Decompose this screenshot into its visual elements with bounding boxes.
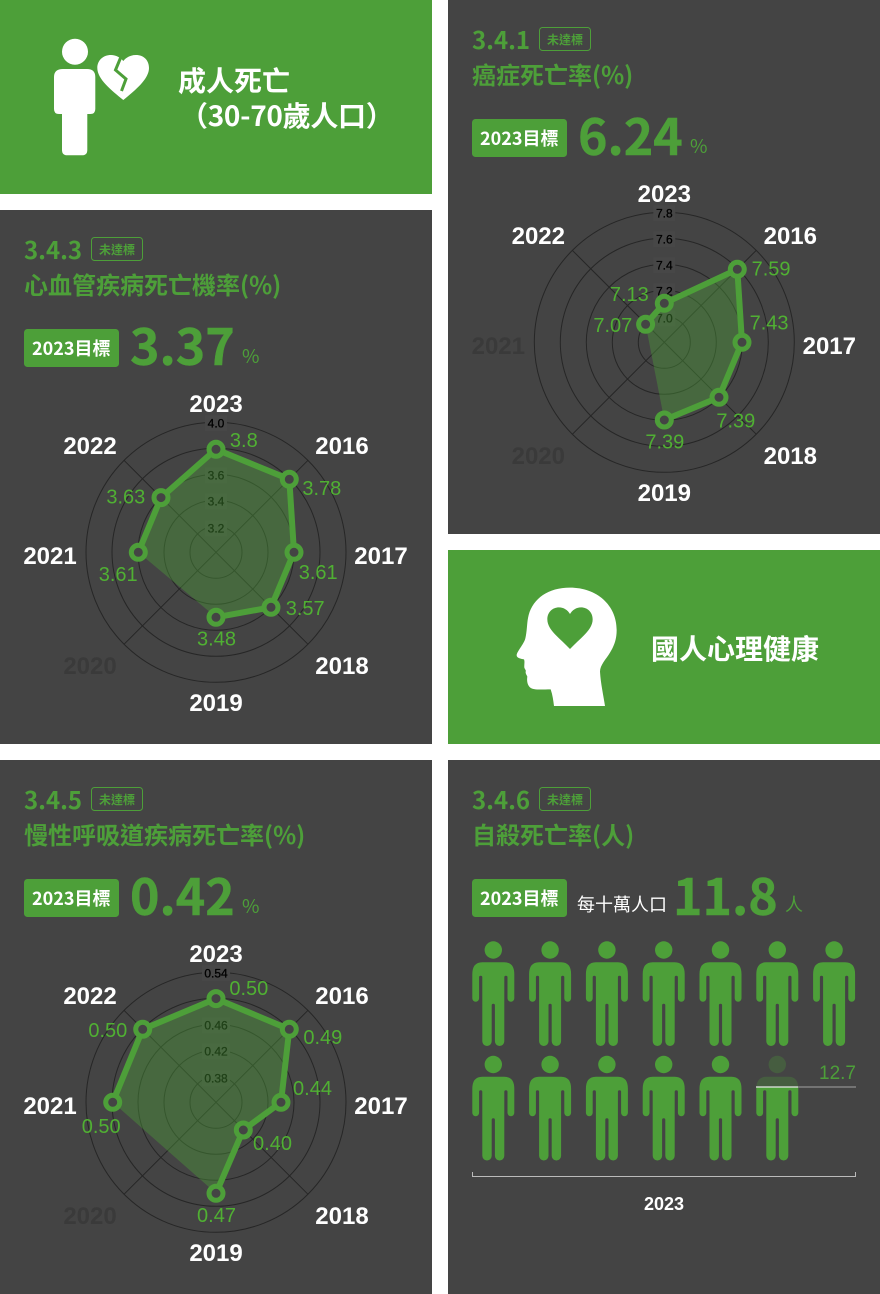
heading: adult mortality: 成人死亡 xyxy=(178,60,290,100)
radar chart: cancer mortality: 7.4 xyxy=(656,258,673,272)
heading: 3.4.5: 慢性呼吸道疾病死亡率(%) xyxy=(24,816,305,851)
radar chart: cancer mortality: 7.8 xyxy=(656,206,673,220)
radar chart: cancer mortality: 2017 xyxy=(803,333,856,360)
heading: 3.4.1: 未達標 xyxy=(547,31,583,48)
pictogram chart: people count xyxy=(472,941,855,1160)
icon: person with broken heart xyxy=(54,39,149,155)
radar chart: chronic respiratory mortality: 0.46 xyxy=(204,1018,228,1032)
target value: 0.42%: % xyxy=(242,892,260,919)
radar chart: cardiovascular mortality: 2016 xyxy=(315,433,369,460)
radar chart: chronic respiratory mortality: 0.42 xyxy=(204,1044,228,1058)
radar chart: cancer mortality: 2022 xyxy=(512,223,565,250)
radar chart: chronic respiratory mortality xyxy=(23,941,408,1267)
radar chart: cardiovascular mortality: 4.0 xyxy=(208,416,225,430)
radar chart: cardiovascular mortality: 2020 xyxy=(63,653,117,680)
panel: 3.4.1 cancer mortality xyxy=(448,0,880,534)
heading: 3.4.1: 癌症死亡率(%) xyxy=(472,56,633,91)
radar chart: chronic respiratory mortality: 2020 xyxy=(63,1203,117,1230)
radar chart: chronic respiratory mortality: 0.54 xyxy=(204,966,228,980)
target value: 11.8 per 100,000: 每十萬人口 xyxy=(577,891,667,917)
radar chart: cardiovascular mortality: 3.6 xyxy=(208,468,225,482)
panel: mental health banner xyxy=(448,550,880,744)
radar chart: cancer mortality: 7.07 xyxy=(593,315,632,337)
heading: 3.4.6: 自殺死亡率(人) xyxy=(472,816,634,851)
radar chart: cardiovascular mortality: 3.8 xyxy=(230,430,258,452)
heading: mental health: 國人心理健康 xyxy=(651,628,819,668)
radar chart: cardiovascular mortality: 2023 xyxy=(189,391,243,418)
heading: 3.4.3: 心血管疾病死亡機率(%) xyxy=(24,266,281,301)
target value: 0.42% xyxy=(24,858,260,930)
radar chart: cancer mortality: 7.6 xyxy=(656,232,673,246)
radar chart: chronic respiratory mortality: 2018 xyxy=(315,1203,369,1230)
panel: 3.4.3 cardiovascular mortality xyxy=(0,210,432,744)
radar chart: cardiovascular mortality: 3.57 xyxy=(286,598,325,620)
target value: 6.24%: 6.24 xyxy=(578,98,683,170)
target value: 3.37%: 2023目標 xyxy=(32,335,110,361)
radar chart: cancer mortality: 7.39 xyxy=(645,431,684,453)
radar chart: chronic respiratory mortality: 0.49 xyxy=(303,1027,342,1049)
heading: 3.4.3: 未達標 xyxy=(99,241,135,258)
radar chart: cardiovascular mortality: 2022 xyxy=(63,433,117,460)
target value: 11.8 per 100,000: 2023目標 xyxy=(480,885,558,911)
radar chart: cancer mortality: 2023 xyxy=(638,181,691,208)
radar chart: cancer mortality: 2019 xyxy=(638,480,691,507)
heading: 3.4.3: 3.4.3 xyxy=(24,231,82,266)
axis bracket: 2023 xyxy=(472,1172,856,1214)
radar chart: chronic respiratory mortality: 0.38 xyxy=(204,1071,228,1085)
heading: adult mortality xyxy=(178,60,393,135)
panel: 3.4.6 suicide mortality xyxy=(448,760,880,1294)
heading: 3.4.1: 3.4.1 xyxy=(472,21,530,56)
heading: 3.4.6: 未達標 xyxy=(547,791,583,808)
reference line: 12.7 xyxy=(756,1063,856,1087)
radar chart: chronic respiratory mortality: 2016 xyxy=(315,983,369,1010)
heading: 3.4.6 xyxy=(472,781,634,851)
radar chart: chronic respiratory mortality: 2017 xyxy=(354,1093,408,1120)
radar chart: cardiovascular mortality: 3.63 xyxy=(106,486,145,508)
radar chart: cancer mortality: 7.43 xyxy=(750,312,789,334)
target value: 3.37%: 3.37 xyxy=(130,308,235,380)
radar chart: cardiovascular mortality: 3.78 xyxy=(302,478,341,500)
panel: 3.4.5 chronic respiratory mortality xyxy=(0,760,432,1294)
radar chart: chronic respiratory mortality: 0.50 xyxy=(229,978,268,1000)
radar chart: cancer mortality: 7.0 xyxy=(656,311,673,325)
radar chart: cardiovascular mortality: 2018 xyxy=(315,653,369,680)
radar chart: chronic respiratory mortality: 0.50 xyxy=(82,1116,121,1138)
radar chart: cardiovascular mortality: 3.4 xyxy=(208,494,225,508)
panel: adult mortality banner xyxy=(0,0,432,194)
target value: 11.8 per 100,000: 人 xyxy=(785,891,803,917)
radar chart: cardiovascular mortality: 3.2 xyxy=(208,521,225,535)
target value: 3.37%: % xyxy=(242,342,260,369)
radar chart: cancer mortality: 7.59 xyxy=(752,258,791,280)
radar chart: chronic respiratory mortality: 0.44 xyxy=(293,1078,332,1100)
icon: head with heart xyxy=(517,588,617,706)
radar chart: chronic respiratory mortality: 0.40 xyxy=(253,1133,292,1155)
radar chart: chronic respiratory mortality: 0.47 xyxy=(197,1205,236,1227)
target value: 6.24% xyxy=(472,98,708,170)
radar chart: cancer mortality: 2020 xyxy=(512,443,565,470)
target value: 6.24%: 2023目標 xyxy=(480,125,558,151)
radar chart: cancer mortality: 2018 xyxy=(764,443,817,470)
radar chart: cancer mortality: 2021 xyxy=(472,333,525,360)
target value: 3.37% xyxy=(24,308,260,380)
heading: 3.4.1 xyxy=(472,21,633,91)
radar chart: cardiovascular mortality: 3.48 xyxy=(197,628,236,650)
heading: 3.4.5: 3.4.5 xyxy=(24,781,82,816)
radar chart: chronic respiratory mortality: 0.50 xyxy=(88,1020,127,1042)
reference line: 12.7: 12.7 xyxy=(819,1063,856,1084)
radar chart: cardiovascular mortality: 2021 xyxy=(23,543,77,570)
axis bracket: 2023: 2023 xyxy=(644,1194,684,1214)
radar chart: cardiovascular mortality xyxy=(23,391,408,717)
radar chart: chronic respiratory mortality: 2023 xyxy=(189,941,243,968)
target value: 0.42%: 0.42 xyxy=(130,858,235,930)
target value: 11.8 per 100,000: 11.8 xyxy=(673,858,778,930)
radar chart: chronic respiratory mortality: 2022 xyxy=(63,983,117,1010)
heading: 3.4.5 xyxy=(24,781,305,851)
target value: 11.8 per 100,000 xyxy=(472,858,803,930)
heading: 3.4.3 xyxy=(24,231,281,301)
radar chart: cancer mortality: 2016 xyxy=(764,223,817,250)
radar chart: cancer mortality xyxy=(472,181,856,507)
radar chart: chronic respiratory mortality: 2021 xyxy=(23,1093,77,1120)
radar chart: cardiovascular mortality: 3.61 xyxy=(299,562,338,584)
radar chart: chronic respiratory mortality: 2019 xyxy=(189,1240,243,1267)
target value: 6.24%: % xyxy=(690,132,708,159)
radar chart: cardiovascular mortality: 3.61 xyxy=(99,564,138,586)
heading: adult mortality: （30-70歲人口） xyxy=(180,95,393,135)
radar chart: cancer mortality: 7.13 xyxy=(610,284,649,306)
heading: 3.4.5: 未達標 xyxy=(99,791,135,808)
heading: 3.4.6: 3.4.6 xyxy=(472,781,530,816)
radar chart: cardiovascular mortality: 2017 xyxy=(354,543,408,570)
radar chart: cancer mortality: 7.2 xyxy=(656,284,673,298)
target value: 0.42%: 2023目標 xyxy=(32,885,110,911)
radar chart: cancer mortality: 7.39 xyxy=(716,410,755,432)
radar chart: cardiovascular mortality: 2019 xyxy=(189,690,243,717)
